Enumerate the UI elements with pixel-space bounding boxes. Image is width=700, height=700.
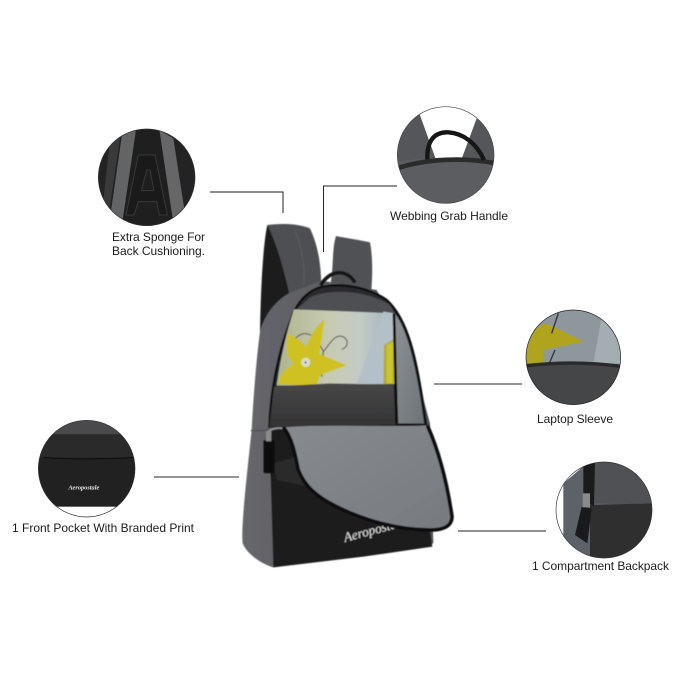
zipper pull: [263, 428, 285, 473]
callout: sponge: [97, 127, 205, 258]
leader line: laptop sleeve: [434, 383, 522, 385]
black front panel: [266, 427, 432, 567]
label: 1 Front Pocket With Branded Print: [12, 521, 195, 535]
label: Back Cushioning.: [112, 244, 205, 258]
interior opening: [269, 285, 426, 427]
icon: pocket circle: Aeropostale: [67, 485, 99, 492]
brand print: Aeropostale: [341, 514, 408, 545]
right lining: [394, 313, 424, 423]
laptop screen: [277, 309, 395, 386]
body: [242, 281, 433, 567]
label: Extra Sponge For: [112, 230, 205, 244]
icon: sleeve circle: [525, 308, 623, 408]
backpack: [242, 224, 452, 567]
icon: zipper circle: [555, 462, 653, 560]
left strap: [260, 224, 321, 333]
label: Webbing Grab Handle: [390, 209, 508, 223]
callout: compartment: [532, 462, 670, 573]
leader line: compartment: [458, 530, 546, 532]
callout: grab handle: [390, 107, 508, 223]
icon: back cushion circle: [97, 127, 197, 227]
grab handle: [321, 273, 355, 285]
leader line: front pocket: [154, 476, 239, 478]
label: 1 Compartment Backpack: [532, 559, 670, 573]
flower: [277, 319, 347, 385]
icon: pocket circle: [37, 418, 137, 520]
icon: handle circle: [397, 107, 497, 207]
right strap: [330, 236, 372, 290]
leader line: handle: [324, 186, 397, 252]
callout: laptop sleeve: [525, 308, 623, 426]
front flap: [283, 425, 452, 530]
label: Laptop Sleeve: [537, 412, 613, 426]
callout: front pocket: [12, 418, 195, 535]
inner pocket: [269, 383, 395, 427]
leader line: sponge: [210, 192, 283, 213]
